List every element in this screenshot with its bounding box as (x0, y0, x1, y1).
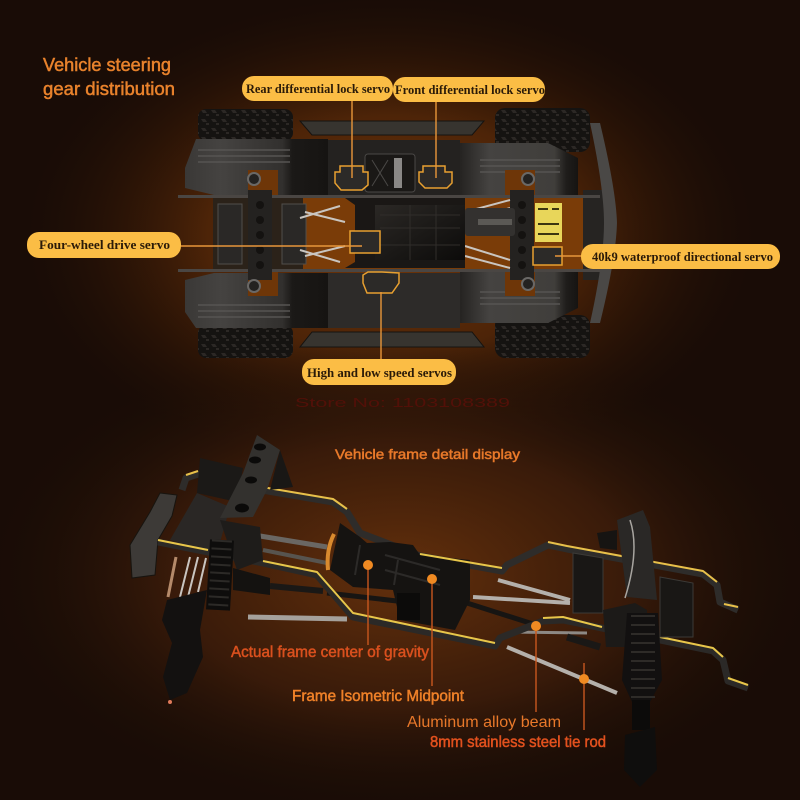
left servo (197, 458, 243, 502)
left arm (233, 568, 270, 595)
callout: rear differential lock servo (242, 76, 393, 101)
top view chassis diagram (178, 108, 617, 358)
transmission (345, 198, 465, 268)
leader lines (368, 565, 584, 730)
leader lines and pills (27, 76, 780, 385)
callout: 40kg waterproof directional servo (581, 244, 780, 269)
callout: front differential lock servo (393, 77, 545, 102)
faint store number: Store No: 1103108389 (295, 395, 510, 410)
callout: front differential lock servo: Front differential lock servo (395, 83, 545, 97)
far side frame rail (182, 471, 738, 610)
centre chassis bed (178, 170, 600, 296)
near side frame rail (158, 540, 748, 688)
body panels (185, 139, 578, 328)
left bracket (130, 493, 177, 578)
heading: vehicle steering gear distribution: Vehicle steering (43, 55, 171, 75)
left plate (170, 493, 230, 553)
left axle and shock (162, 540, 222, 704)
right crossmembers (573, 553, 693, 637)
battery box (365, 154, 415, 192)
callout: 40kg waterproof directional servo: 40k9 waterproof directional servo (592, 250, 773, 264)
right shock and axle (603, 603, 662, 787)
servo outlines (335, 166, 562, 293)
motor (465, 208, 515, 236)
label: aluminum alloy beam: Aluminum alloy beam (407, 714, 561, 731)
heading: vehicle steering gear distribution: gear distribution (43, 79, 175, 99)
label: actual frame center of gravity: Actual frame center of gravity (231, 644, 429, 661)
gearbox (328, 523, 470, 630)
right shock tower (597, 510, 657, 600)
steel links (168, 536, 617, 693)
callout: high and low speed servos: High and low speed servos (307, 366, 452, 380)
label: frame isometric midpoint: Frame Isometric Midpoint (292, 688, 465, 705)
gold circuit board (535, 203, 562, 242)
front bumper (583, 123, 617, 323)
icon: tyres (198, 108, 590, 358)
frame isometric diagram (130, 435, 748, 787)
heading: vehicle frame detail display: Vehicle frame detail display (335, 446, 520, 462)
marker dots (363, 560, 589, 684)
left shock tower (220, 435, 293, 570)
callout: four-wheel drive servo (27, 232, 181, 258)
running boards (300, 121, 484, 347)
callout: high and low speed servos (302, 359, 456, 385)
callout: rear differential lock servo: Rear differential lock servo (246, 82, 390, 96)
label: 8mm stainless steel tie rod: 8mm stainless steel tie rod (430, 734, 606, 751)
callout: four-wheel drive servo: Four-wheel drive servo (39, 238, 170, 252)
